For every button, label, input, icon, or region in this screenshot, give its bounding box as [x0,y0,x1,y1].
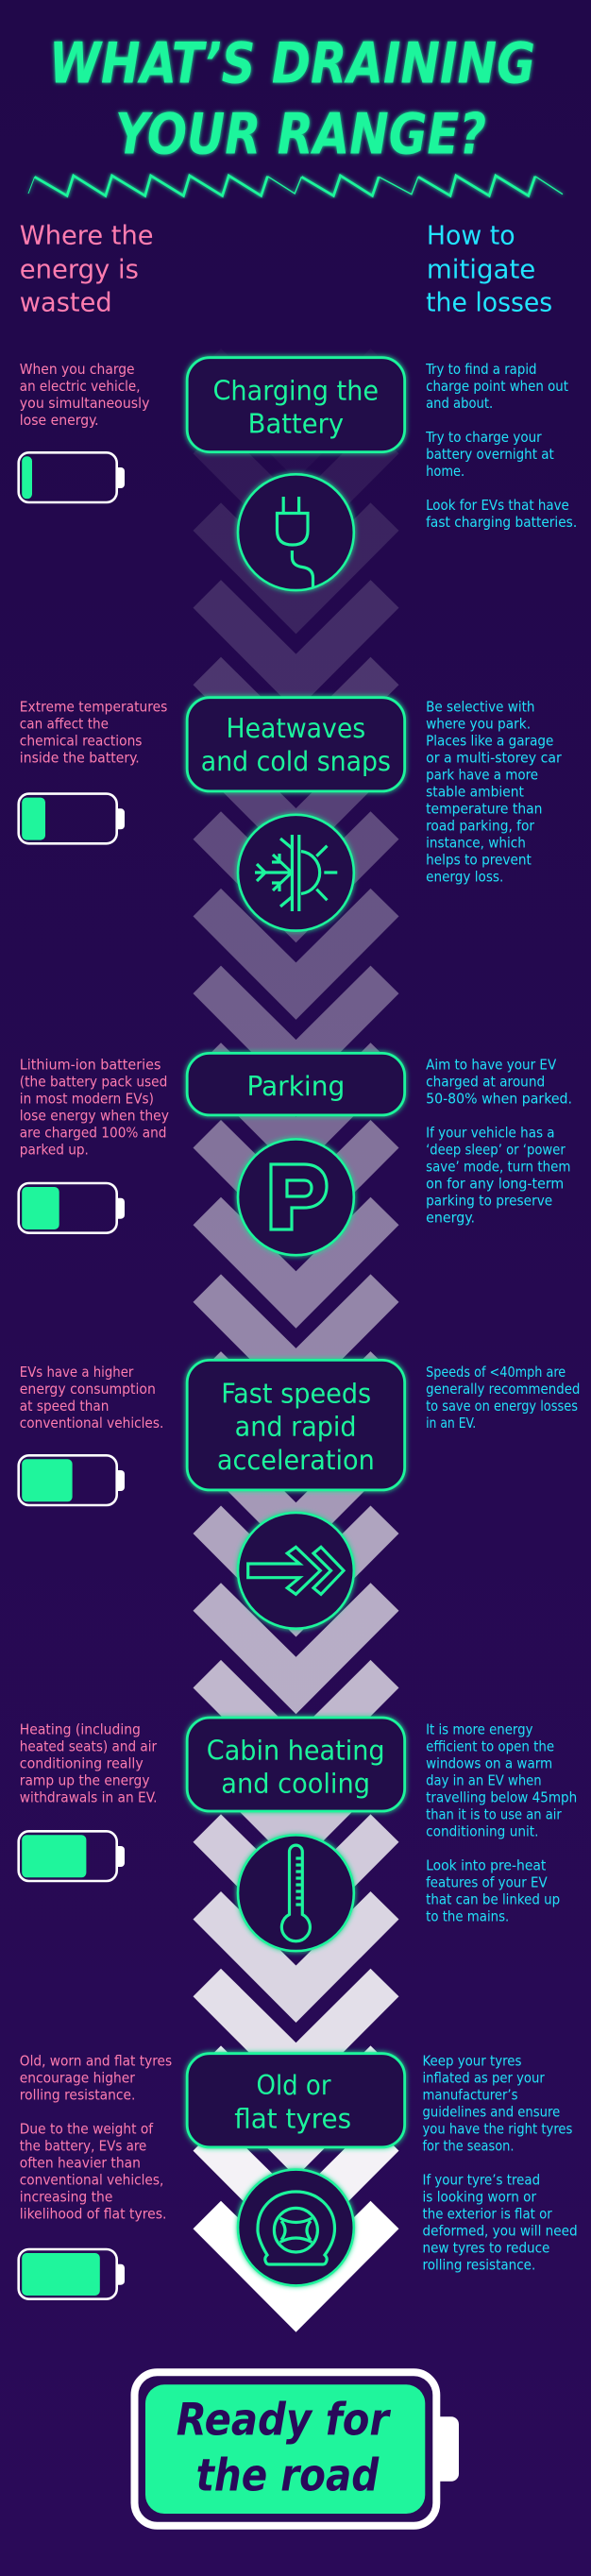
text: how to mitigate, cabin: day in an EV when [426,1771,542,1788]
right column heading [426,220,552,317]
text: where energy is wasted, parking [20,1057,169,1159]
text: how to mitigate, parking: Aim to have your EV [426,1057,557,1074]
text: how to mitigate, parking [426,1057,572,1227]
title [49,30,535,167]
full battery: ready for the road: Ready for [177,2394,392,2446]
panel: cabin heating and cooling [19,1718,577,1951]
text: how to mitigate, tyres [423,2053,578,2274]
text: how to mitigate, parking: on for any long-term [426,1176,564,1193]
text: where energy is wasted, speed: conventional vehicles. [20,1415,163,1432]
text: how to mitigate, parking: energy. [426,1210,475,1227]
text: where energy is wasted, tyres: the battery, EVs are [20,2138,146,2155]
left column heading: energy is [20,254,139,284]
text: where energy is wasted, temperature [20,698,167,766]
text: how to mitigate, temperature: Be selective with [426,698,534,715]
icon: thermometer in circle [238,1835,354,1951]
panel: fast speeds and rapid acceleration [19,1360,580,1629]
right column heading: How to [427,220,515,250]
text: how to mitigate, charging: charge point when out [426,378,569,395]
text: how to mitigate, parking: If your vehicle has a [426,1125,555,1142]
full battery: ready for the road [134,2372,459,2526]
text: where energy is wasted, tyres [20,2053,172,2223]
text: how to mitigate, speed: in an EV. [426,1415,476,1432]
text: where energy is wasted, cabin: ramp up the energy [20,1771,149,1788]
text: where energy is wasted, parking: in most modern EVs) [20,1091,154,1108]
text: how to mitigate, charging: battery overnight at [426,446,554,463]
text: how to mitigate, tyres: the exterior is flat or [423,2206,552,2223]
text: where energy is wasted, parking: Lithium-ion batteries [20,1057,160,1074]
text: how to mitigate, cabin: efficient to open the [426,1737,554,1754]
panel: heatwaves and cold snaps [19,698,562,931]
text: how to mitigate, cabin [426,1720,577,1924]
left column heading: wasted [20,287,112,317]
text: where energy is wasted, parking: lose energy when they [20,1108,169,1125]
text: how to mitigate, temperature: park have a more [426,766,538,783]
heading box: old or flat tyres: Old or [257,2070,331,2101]
text: how to mitigate, cabin: Look into pre-heat [426,1856,547,1873]
heading box: fast speeds and rapid acceleration [187,1360,405,1490]
title: YOUR RANGE? [115,101,486,167]
text: how to mitigate, speed: to save on energy losses [426,1398,578,1415]
heading box: old or flat tyres [187,2054,405,2147]
text: how to mitigate, temperature: or a multi-storey car [426,749,562,766]
text: how to mitigate, parking: ‘deep sleep’ or ‘power [426,1142,566,1159]
text: where energy is wasted, charging: an electric vehicle, [20,378,140,395]
heading box: fast speeds and rapid acceleration: Fast speeds [221,1378,371,1409]
text: how to mitigate, temperature: energy loss. [426,868,503,885]
icon: battery half [19,1455,125,1505]
heading box: charging the battery: Battery [248,409,344,440]
heading box: fast speeds and rapid acceleration: and rapid [235,1412,357,1443]
text: how to mitigate, cabin: than it is to use an air [426,1805,562,1822]
heading box: cabin heating and cooling: Cabin heating [207,1735,385,1766]
heading box: cabin heating and cooling: and cooling [221,1769,370,1800]
text: where energy is wasted, parking: are charged 100% and [20,1125,166,1142]
text: where energy is wasted, tyres: Old, worn and flat tyres [20,2053,172,2070]
text: how to mitigate, temperature: stable ambient [426,783,524,800]
text: where energy is wasted, charging: you simultaneously [20,395,149,412]
text: where energy is wasted, tyres: likelihood of flat tyres. [20,2206,166,2223]
text: where energy is wasted, tyres: encourage higher [20,2070,135,2087]
right column heading: the losses [426,287,552,317]
text: how to mitigate, cabin: that can be linked up [426,1890,560,1907]
text: how to mitigate, speed: generally recommended [426,1381,580,1398]
text: where energy is wasted, cabin [20,1720,157,1805]
heading box: heatwaves and cold snaps: Heatwaves [227,713,365,744]
text: how to mitigate, parking: 50-80% when parked. [426,1091,572,1108]
icon: battery low [19,794,125,843]
text: where energy is wasted, tyres: rolling resistance. [20,2087,135,2104]
text: how to mitigate, tyres: rolling resistance. [423,2257,535,2274]
text: how to mitigate, tyres: manufacturer’s [423,2087,517,2104]
text: how to mitigate, charging: and about. [426,395,493,412]
text: where energy is wasted, parking: (the battery pack used [20,1074,167,1091]
text: where energy is wasted, charging [20,361,149,429]
text: how to mitigate, temperature [426,698,562,885]
text: where energy is wasted, temperature: can affect the [20,715,109,732]
panel: charging the battery [19,358,577,590]
text: how to mitigate, parking: save’ mode, turn them [426,1159,570,1176]
panel: parking [19,1053,572,1255]
text: how to mitigate, charging: Try to find a rapid [425,361,536,378]
text: how to mitigate, tyres: for the season. [423,2138,514,2155]
text: where energy is wasted, speed: energy consumption [20,1381,156,1398]
icon: plug in circle [238,474,354,590]
text: how to mitigate, temperature: helps to prevent [426,851,532,868]
heading box: parking [187,1053,405,1115]
text: how to mitigate, tyres: If your tyre’s tread [423,2172,540,2189]
right column heading: mitigate [427,254,535,284]
text: how to mitigate, tyres: Keep your tyres [423,2053,521,2070]
icon: battery one third [19,1183,125,1233]
text: how to mitigate, tyres: is looking worn or [423,2189,536,2206]
heading box: charging the battery [187,358,405,452]
text: how to mitigate, cabin: conditioning unit. [426,1822,538,1839]
text: how to mitigate, parking: charged at around [426,1074,545,1091]
heading box: charging the battery: Charging the [213,375,379,406]
text: where energy is wasted, cabin: heated seats) and air [20,1737,157,1754]
icon: battery nearly empty [19,452,125,502]
text: how to mitigate, cabin: It is more energy [426,1720,532,1737]
text: where energy is wasted, speed: EVs have a higher [20,1364,134,1381]
text: how to mitigate, temperature: where you park. [426,715,531,732]
heading box: old or flat tyres: flat tyres [234,2103,351,2134]
text: how to mitigate, temperature: road parking, for [426,817,534,834]
text: how to mitigate, charging: Try to charge your [425,429,542,446]
text: where energy is wasted, cabin: withdrawals in an EV. [20,1788,157,1805]
text: where energy is wasted, temperature: Extreme temperatures [20,698,167,715]
text: how to mitigate, speed: Speeds of <40mph are [426,1364,566,1381]
text: how to mitigate, tyres: new tyres to reduce [423,2240,549,2257]
text: how to mitigate, charging: home. [426,463,464,480]
text: how to mitigate, cabin: features of your EV [426,1873,548,1890]
icon: speed arrow in circle [238,1513,354,1629]
title: WHAT’S DRAINING [49,30,535,96]
text: where energy is wasted, tyres: Due to the weight of [20,2121,154,2138]
heading box: parking: Parking [247,1071,345,1102]
text: where energy is wasted, cabin: conditioning really [20,1754,144,1771]
text: where energy is wasted, cabin: Heating (including [20,1720,141,1737]
icon: snowflake and sun in circle [238,815,354,931]
text: how to mitigate, tyres: inflated as per your [423,2070,545,2087]
text: where energy is wasted, speed [20,1364,163,1432]
text: how to mitigate, temperature: Places like a garage [426,732,553,749]
heading box: heatwaves and cold snaps [187,698,405,791]
icon: battery two thirds [19,1831,125,1881]
text: where energy is wasted, temperature: inside the battery. [20,749,140,766]
text: where energy is wasted, tyres: often heavier than [20,2155,141,2172]
text: where energy is wasted, speed: at speed than [20,1398,109,1415]
text: where energy is wasted, parking: parked up. [20,1142,89,1159]
left column heading: Where the [20,220,153,250]
icon: tyre in circle [238,2170,354,2285]
text: how to mitigate, cabin: windows on a warm [426,1754,552,1771]
chevron arrow column [193,348,398,2332]
text: how to mitigate, tyres: guidelines and ensure [423,2104,560,2121]
zigzag divider [28,176,563,195]
text: where energy is wasted, charging: lose energy. [20,412,99,429]
text: how to mitigate, charging: Look for EVs that have [426,497,569,514]
text: how to mitigate, cabin: to the mains. [426,1907,509,1924]
text: how to mitigate, charging [425,361,577,531]
heading box: heatwaves and cold snaps: and cold snaps [201,746,391,777]
icon: letter P in circle [238,1139,354,1255]
text: how to mitigate, temperature: temperature than [426,800,542,817]
text: where energy is wasted, tyres: increasing the [20,2189,112,2206]
text: how to mitigate, charging: fast charging batteries. [426,514,577,531]
text: how to mitigate, tyres: you have the right tyres [423,2121,572,2138]
text: where energy is wasted, charging: When you charge [20,361,135,378]
heading box: cabin heating and cooling [187,1718,405,1811]
heading box: fast speeds and rapid acceleration: acceleration [217,1445,375,1476]
left column heading [20,220,153,317]
panel: old or flat tyres [19,2053,578,2299]
text: where energy is wasted, temperature: chemical reactions [20,732,142,749]
text: where energy is wasted, tyres: conventional vehicles, [20,2172,163,2189]
text: how to mitigate, tyres: deformed, you will need [423,2223,578,2240]
icon: battery nearly full [19,2249,125,2299]
full battery: ready for the road: the road [196,2450,380,2502]
text: how to mitigate, temperature: instance, which [426,834,526,851]
text: how to mitigate, speed [426,1364,580,1432]
text: how to mitigate, parking: parking to preserve [426,1193,552,1210]
text: how to mitigate, cabin: travelling below 45mph [426,1788,577,1805]
